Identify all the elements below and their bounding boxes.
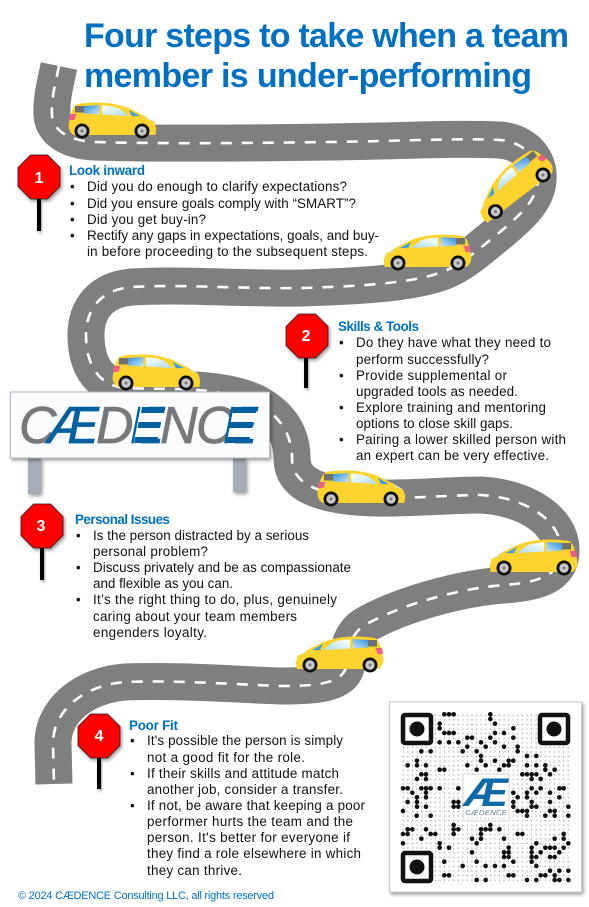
step 1 text: • — [70, 179, 75, 194]
step 3 text: • — [76, 592, 81, 607]
step 1 text: in before proceeding to the subsequent steps. — [87, 244, 368, 259]
step 4 text: If their skills and attitude match — [147, 766, 339, 781]
step 2 text: Explore training and mentoring — [356, 400, 546, 415]
step 4 text: they can thrive. — [147, 863, 242, 878]
QR modules — [403, 714, 568, 880]
step 2 text: Provide supplemental or — [356, 368, 508, 383]
step 4 text: It's possible the person is simply — [147, 733, 343, 748]
step 2 text: • — [339, 400, 344, 415]
car 1 — [69, 103, 156, 138]
step 4 text: Poor Fit — [129, 718, 179, 733]
step 3 text: personal problem? — [93, 544, 208, 559]
step 2 text: perform successfully? — [356, 352, 489, 367]
step 1 text: Look inward — [69, 163, 145, 178]
step 2 text: • — [339, 335, 344, 350]
step 2 text: upgraded tools as needed. — [356, 384, 518, 399]
step 4 text: If not, be aware that keeping a poor — [147, 798, 366, 813]
step 1 text: • — [70, 196, 75, 211]
step 4 text: performer hurts the team and the — [147, 814, 353, 829]
step 2 text: • — [339, 368, 344, 383]
QR finder patterns — [403, 715, 568, 881]
step 3 text: and flexible as you can. — [93, 576, 233, 591]
step 1 text: Did you get buy-in? — [87, 212, 206, 227]
road — [52, 66, 561, 784]
step 2 text: Do they have what they need to — [356, 335, 551, 350]
step 1 text: Did you do enough to clarify expectations? — [87, 179, 347, 194]
step 4 text: • — [130, 733, 135, 748]
QR code panel — [390, 702, 582, 892]
QR center logo: CÆDENCE — [465, 808, 508, 817]
step 4 text: • — [130, 766, 135, 781]
title: member is under-performing — [84, 57, 532, 95]
stop sign 3 — [21, 504, 63, 580]
billboard — [10, 392, 270, 494]
step 3 text: engenders loyalty. — [93, 625, 207, 640]
stop sign 1 — [18, 155, 60, 231]
QR center logo: Æ — [462, 771, 509, 815]
car 7 — [296, 637, 383, 672]
billboard posts — [28, 458, 246, 494]
step 3 text: Personal Issues — [75, 512, 170, 527]
stop sign 2: 2 — [302, 328, 311, 345]
title: Four steps to take when a team — [84, 17, 569, 55]
step 2 text: Pairing a lower skilled person with — [356, 432, 566, 447]
step 1 text — [69, 163, 379, 259]
step 2 text: an expert can be very effective. — [356, 448, 549, 463]
QR center logo: CONSULTING — [467, 816, 506, 820]
step 4 text: they find a role elsewhere in which — [147, 846, 361, 861]
step 3 text: • — [76, 560, 81, 575]
step 3 text: Is the person distracted by a serious — [93, 528, 309, 543]
step 1 text: Rectify any gaps in expectations, goals, and buy- — [87, 228, 379, 243]
step 3 text: caring about your team members — [93, 609, 297, 624]
car 6 — [490, 540, 577, 576]
step 3 text — [75, 512, 351, 640]
step 1 text: Did you ensure goals comply with “SMART”? — [87, 196, 356, 211]
step 3 text: • — [76, 528, 81, 543]
copyright footer: © 2024 CÆDENCE Consulting LLC, all rights reserved — [18, 890, 274, 902]
stop sign 4: 4 — [95, 728, 104, 745]
car 4 — [113, 355, 200, 390]
car 5 — [318, 471, 405, 506]
billboard panel — [10, 392, 270, 458]
step 3 text: Discuss privately and be as compassionate — [93, 560, 351, 575]
step 2 text: • — [339, 432, 344, 447]
car 2 — [467, 144, 558, 226]
stop sign 1: 1 — [35, 170, 44, 187]
step 3 text: It’s the right thing to do, plus, genuinely — [93, 592, 337, 607]
step 4 text: another job, consider a transfer. — [147, 782, 343, 797]
step 2 text: Skills & Tools — [338, 319, 419, 334]
step 1 text: • — [70, 228, 75, 243]
step 4 text: • — [130, 798, 135, 813]
car 3 — [384, 235, 471, 270]
step 2 text — [338, 319, 566, 463]
title — [84, 17, 569, 95]
step 4 text — [129, 718, 366, 878]
stop sign 4 — [78, 714, 120, 789]
step 4 text: person. It's better for everyone if — [147, 830, 350, 845]
logo: CÆDENCE — [19, 397, 259, 455]
step 2 text: options to close skill gaps. — [356, 416, 513, 431]
stop sign 3: 3 — [37, 518, 46, 535]
step 4 text: not a good fit for the role. — [147, 750, 305, 765]
stop sign 2 — [286, 314, 328, 388]
step 1 text: • — [70, 212, 75, 227]
